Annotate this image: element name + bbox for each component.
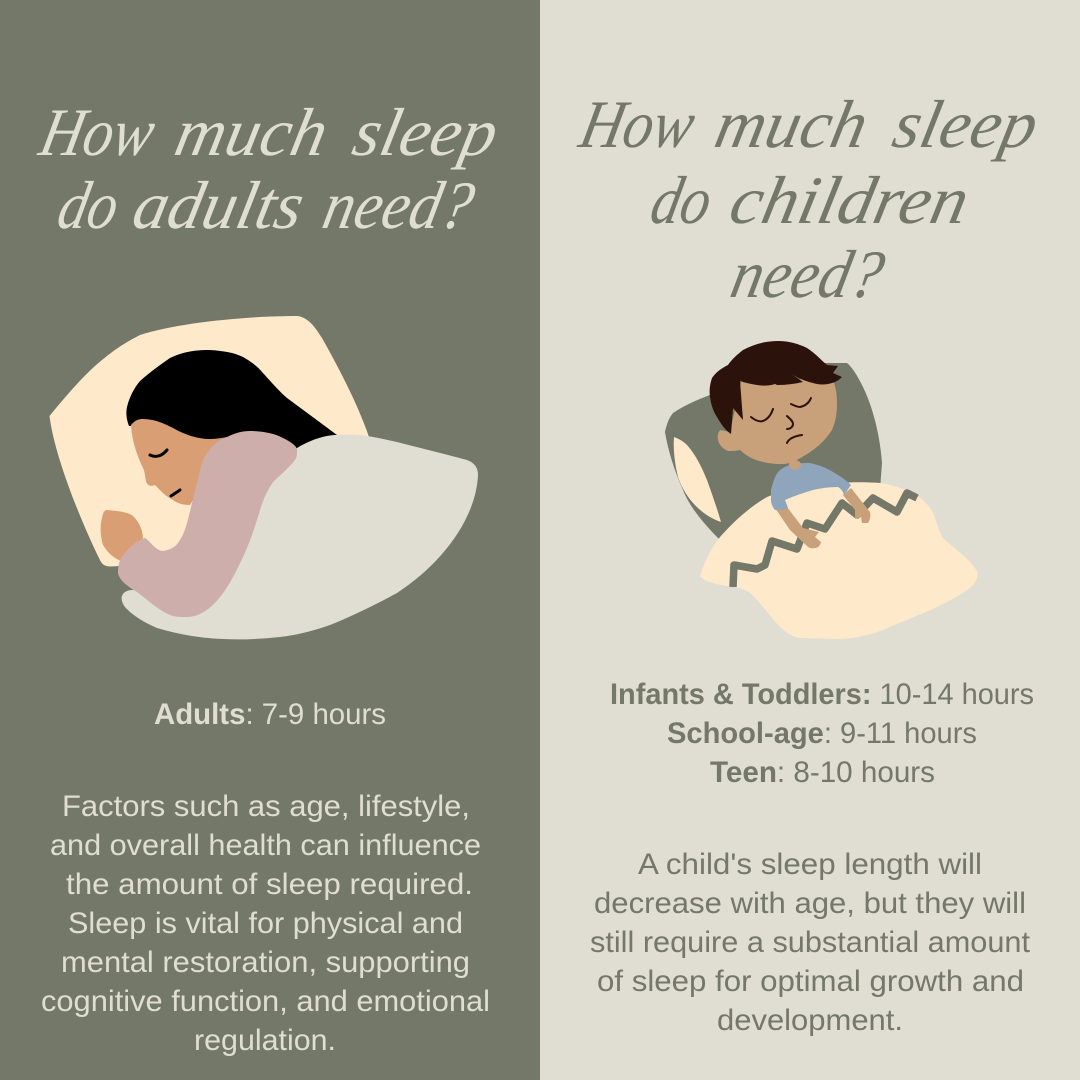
title: children: How — [573, 87, 702, 162]
quilt — [700, 482, 978, 639]
panel: children background — [540, 0, 1080, 1080]
right arm — [843, 488, 870, 523]
title: children: need? — [725, 237, 891, 312]
title: adults: sleep — [347, 95, 505, 170]
text: adults paragraph: and overall health can influence — [50, 829, 481, 862]
sleeve — [118, 431, 297, 617]
title: adults — [33, 95, 505, 243]
hand — [101, 510, 143, 562]
text: children paragraph: of sleep for optimal growth and — [597, 965, 1024, 998]
text: child hours: School-age: 9-11 hours — [667, 717, 977, 750]
quilt zigzag — [733, 493, 917, 587]
title: adults: need? — [317, 168, 481, 243]
title: children: do — [645, 163, 719, 238]
text: adults paragraph: Factors such as age, lifestyle, — [62, 790, 470, 823]
pillow — [665, 363, 882, 542]
title: adults: much — [169, 95, 335, 170]
title: adults: How — [33, 95, 162, 170]
right eye — [791, 398, 811, 407]
title: children — [573, 87, 1045, 312]
hair — [126, 350, 337, 455]
illustration: sleeping child — [665, 341, 978, 639]
text: adult hours: Adults: 7-9 hours — [154, 698, 386, 731]
text: adults paragraph: mental restoration, supporting — [61, 946, 470, 979]
text: adults paragraph: regulation. — [194, 1024, 336, 1057]
mouth — [787, 435, 802, 443]
head — [718, 378, 837, 464]
text: child hours: Infants & Toddlers: 10-14 hours — [610, 678, 1034, 711]
text: children paragraph: A child's sleep length will — [638, 848, 982, 881]
title: children: children — [724, 163, 976, 238]
text: adults paragraph: the amount of sleep required. — [66, 868, 473, 901]
title: adults: adults — [127, 168, 311, 243]
text: child hours — [610, 678, 1034, 789]
nose — [787, 416, 793, 429]
pillow — [50, 316, 369, 566]
text: children paragraph: still require a substantial amount — [590, 926, 1030, 959]
illustration: sleeping adult — [50, 316, 478, 639]
shirt — [771, 463, 851, 510]
text: adults paragraph — [41, 790, 490, 1057]
left eye — [751, 409, 773, 421]
text: children paragraph: decrease with age, but they will — [594, 887, 1026, 920]
second eye closed — [171, 490, 180, 496]
title: children: sleep — [887, 87, 1045, 162]
neck — [789, 460, 801, 470]
hair — [710, 341, 842, 434]
title: children: much — [709, 87, 875, 162]
text: children paragraph — [590, 848, 1030, 1037]
text: adults paragraph: Sleep is vital for physical and — [68, 907, 463, 940]
text: adults paragraph: cognitive function, and emotional — [41, 985, 490, 1018]
panel: adults background — [0, 0, 540, 1080]
title: adults: do — [52, 168, 126, 243]
face — [131, 419, 227, 505]
text: children paragraph: development. — [717, 1004, 903, 1037]
left arm — [775, 507, 821, 548]
pillow highlight — [674, 437, 721, 522]
text: child hours: Teen: 8-10 hours — [710, 756, 935, 789]
blanket — [122, 435, 478, 639]
eye closed — [150, 450, 167, 456]
